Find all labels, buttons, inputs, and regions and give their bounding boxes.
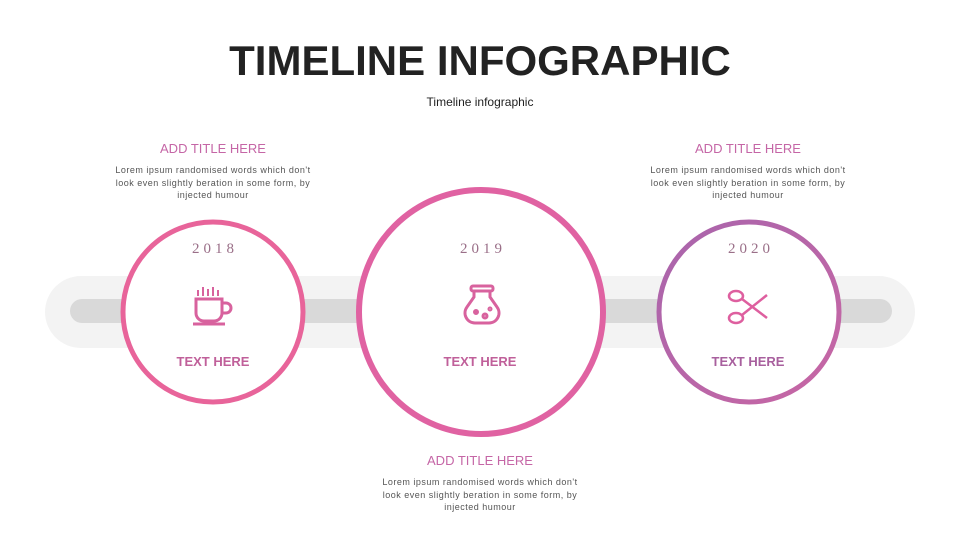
label 2019: TEXT HERE: [444, 354, 516, 369]
subtitle: Timeline infographic: [427, 95, 533, 109]
panel: 2019 bottom text: ADD TITLE HERE: [427, 453, 533, 468]
panel: 2018 top text: ADD TITLE HERE: [160, 141, 266, 156]
panel: 2020 top text: Lorem ipsum randomised words which don't look even slightly beration in some form, by injected humour: [650, 165, 846, 200]
panel: 2020 top text: ADD TITLE HERE: [695, 141, 801, 156]
title: TIMELINE INFOGRAPHIC: [229, 37, 731, 84]
icon: jar: [465, 286, 499, 323]
panel: 2018 top text: [115, 141, 311, 200]
panel: 2019 bottom text: Lorem ipsum randomised words which don't look even slightly beration in some form, by injected humour: [382, 477, 578, 512]
panel: 2019 bottom text: [382, 453, 578, 512]
label 2020: TEXT HERE: [712, 354, 784, 369]
label 2018: TEXT HERE: [177, 354, 249, 369]
icon: coffee cup: [193, 287, 231, 324]
year 2018: 2018: [192, 241, 238, 257]
panel: 2020 top text: [650, 141, 846, 200]
year 2020: 2020: [728, 241, 774, 257]
panel: 2018 top text: Lorem ipsum randomised words which don't look even slightly beration in some form, by injected humour: [115, 165, 311, 200]
year 2019: 2019: [460, 241, 506, 257]
icon: scissors: [729, 291, 767, 323]
